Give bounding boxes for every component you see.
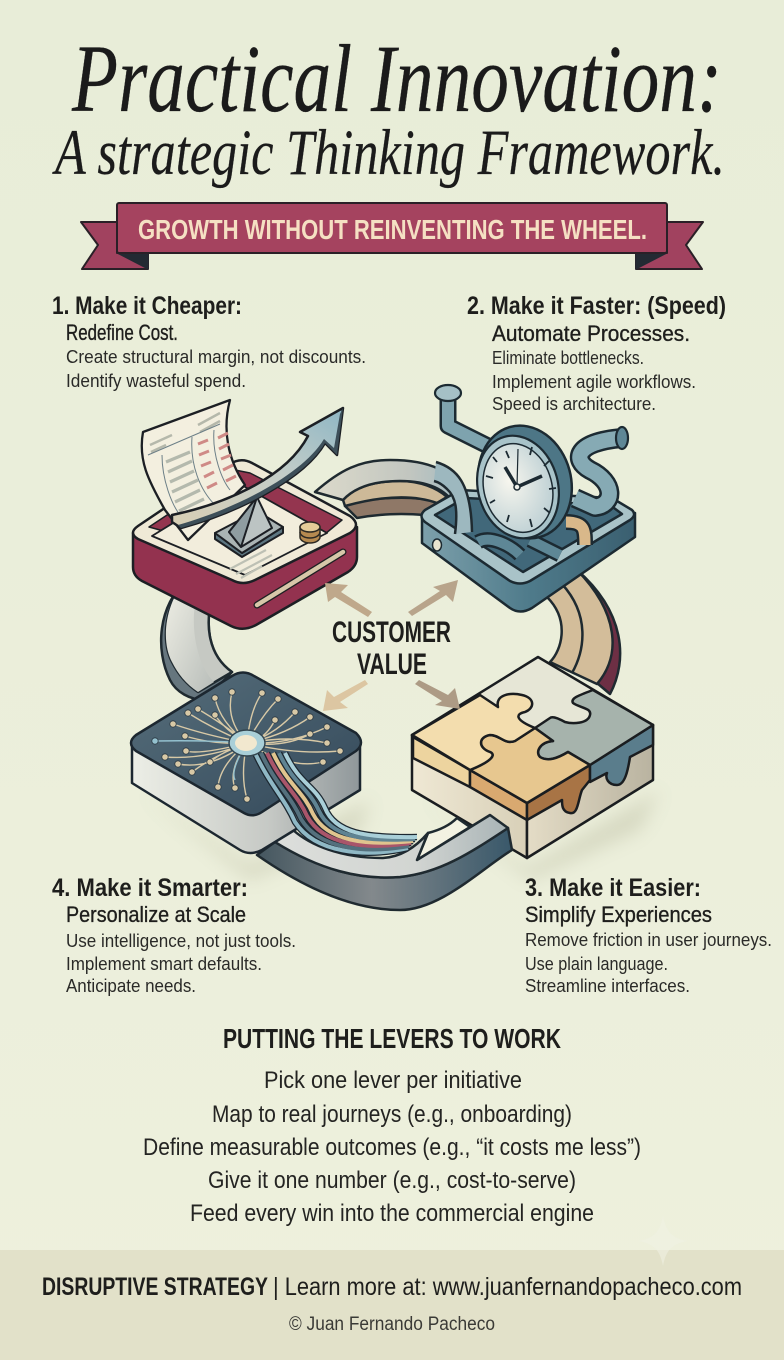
base block <box>412 725 653 858</box>
section 2: make it faster: Implement agile workflows. <box>492 372 696 392</box>
copyright: © Juan Fernando Pacheco <box>289 1314 495 1335</box>
arrow to speed <box>408 580 458 616</box>
section 3: make it easier: Use plain language. <box>525 954 668 974</box>
ring tube entering tray <box>434 462 472 534</box>
title <box>52 25 725 189</box>
arrow to ease <box>415 680 460 709</box>
growth arrow <box>172 408 343 528</box>
center label: customer value <box>332 616 451 681</box>
section 3: make it easier <box>525 874 772 996</box>
section 3: make it easier: Streamline interfaces. <box>525 976 690 996</box>
center arrows <box>323 580 460 711</box>
arrow to cost <box>325 583 372 617</box>
module 3: puzzle lever <box>412 657 653 858</box>
soft shadows <box>140 790 660 880</box>
clock <box>466 415 584 549</box>
action list: Feed every win into the commercial engine <box>190 1200 594 1227</box>
slab <box>131 672 361 853</box>
icon: sparkle <box>639 1216 687 1266</box>
fulcrum <box>215 497 283 557</box>
data cable bundle <box>255 753 417 853</box>
footer link line: DISRUPTIVE STRATEGY <box>42 1273 268 1301</box>
module 2: speed lever <box>422 385 635 612</box>
section 4: make it smarter: Use intelligence, not just tools. <box>66 931 296 951</box>
action list: Map to real journeys (e.g., onboarding) <box>212 1101 572 1128</box>
banner ribbon <box>81 203 703 269</box>
action list: Pick one lever per initiative <box>264 1067 522 1094</box>
action list: Define measurable outcomes (e.g., “it costs me less”) <box>143 1134 641 1161</box>
cycle diagram <box>131 385 660 910</box>
circuit nodes <box>152 689 343 802</box>
section 4: make it smarter <box>52 874 296 996</box>
tray <box>422 490 635 612</box>
section 2: make it faster: Speed is architecture. <box>492 394 656 414</box>
section 2: make it faster <box>467 292 726 414</box>
center label: customer value: VALUE <box>357 648 427 681</box>
section 2: make it faster: 2. Make it Faster: (Speed) <box>467 292 726 320</box>
pipes <box>448 400 622 555</box>
section heading: putting the levers to work: PUTTING THE LEVERS TO WORK <box>223 1023 561 1054</box>
module 1: cost lever <box>133 400 357 629</box>
section 4: make it smarter: Personalize at Scale <box>66 902 246 927</box>
arrow to intelligence <box>323 680 368 711</box>
section 2: make it faster: Eliminate bottlenecks. <box>492 348 644 368</box>
section 3: make it easier: Simplify Experiences <box>525 902 712 927</box>
section 1: make it cheaper: Create structural margin, not discounts. <box>66 347 366 367</box>
center label: customer value: CUSTOMER <box>332 616 451 649</box>
coins <box>300 522 320 543</box>
section 4: make it smarter: Implement smart defaults. <box>66 954 262 974</box>
spreadsheet document <box>142 400 245 540</box>
section 1: make it cheaper <box>52 292 366 391</box>
module 4: intelligence lever <box>131 672 417 853</box>
ring arc: cheaper to faster <box>315 460 472 518</box>
section 4: make it smarter: Anticipate needs. <box>66 976 196 996</box>
action list: Give it one number (e.g., cost-to-serve) <box>208 1167 576 1194</box>
ring arrow: smarter to easier <box>257 815 512 910</box>
central hub <box>229 730 265 756</box>
action list <box>143 1067 641 1227</box>
footer band <box>0 1250 784 1360</box>
tray <box>133 460 357 629</box>
section 4: make it smarter: 4. Make it Smarter: <box>52 874 248 902</box>
section 2: make it faster: Automate Processes. <box>492 321 690 346</box>
ring arc: smarter to cheaper <box>161 580 232 700</box>
section 1: make it cheaper: Identify wasteful spend. <box>66 371 246 391</box>
section 1: make it cheaper: 1. Make it Cheaper: <box>52 292 242 320</box>
section 3: make it easier: Remove friction in user journeys. <box>525 930 772 950</box>
section 3: make it easier: 3. Make it Easier: <box>525 874 701 902</box>
banner text: GROWTH WITHOUT REINVENTING THE WHEEL. <box>138 214 647 245</box>
puzzle pieces <box>412 657 653 803</box>
circuit traces <box>165 692 340 799</box>
section 1: make it cheaper: Redefine Cost. <box>66 320 178 345</box>
ring arc: faster to easier <box>547 570 620 694</box>
